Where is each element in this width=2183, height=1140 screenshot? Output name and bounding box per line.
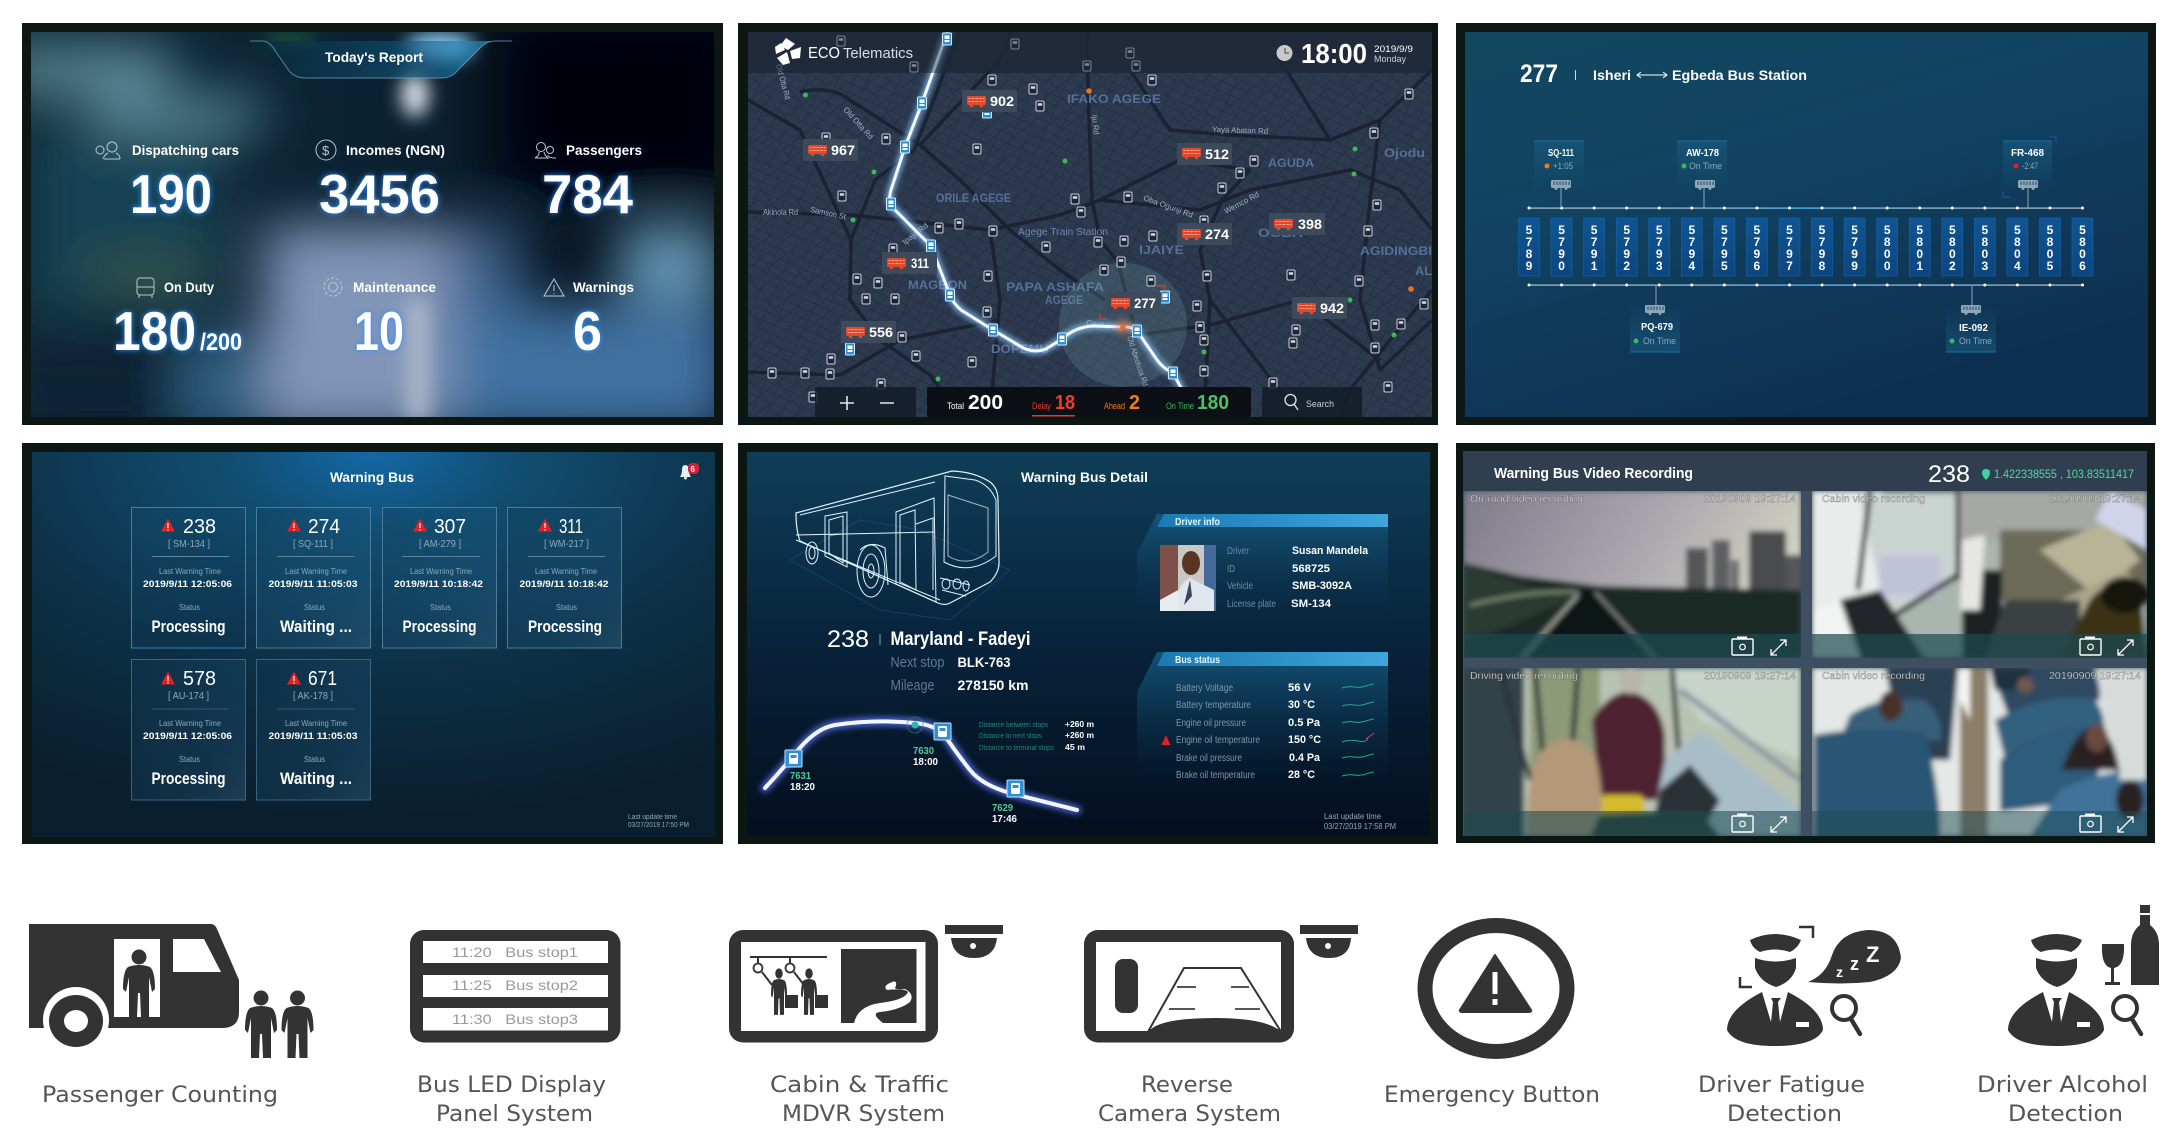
- map place names: Yaya Abatan Rd: [1212, 125, 1268, 136]
- driver info card: SMB-3092A: [1292, 580, 1352, 592]
- bus tag PQ-679: [1630, 285, 1680, 352]
- clock and date: [1276, 44, 1412, 64]
- metric: On Duty: /200: [200, 329, 242, 356]
- bus tag 556: 556: [869, 324, 893, 340]
- icon: LED display: [410, 930, 620, 1042]
- title tab: Today's Report: Today's Report: [325, 49, 423, 65]
- map place names: Old Otta Rd: [774, 63, 792, 100]
- station number columns: 5789: [1526, 223, 1533, 273]
- bus tag 556: [841, 321, 896, 343]
- metric: Warnings: 6: [573, 300, 602, 362]
- feature: Driver Fatigue Detection: [1698, 927, 1901, 1127]
- feature: Bus LED Display Panel System: Bus LED Display: [417, 1073, 606, 1098]
- panel: live route map: [738, 23, 1438, 425]
- feature: Cabin & Traffic MDVR System: MDVR System: [782, 1102, 945, 1127]
- bus status card: Battery temperature: [1176, 700, 1251, 711]
- driver info card: ID: [1227, 564, 1235, 575]
- warning card 671: [ AK-178 ]: [293, 691, 333, 702]
- warning card 274: [256, 508, 370, 648]
- map place names: Iju Rd: [1090, 114, 1101, 135]
- warning card 578: Processing: [152, 769, 226, 788]
- fleet status bar: [927, 387, 1251, 417]
- map place names: Oba Ogunji Rd: [1142, 193, 1194, 220]
- feature: Driver Fatigue Detection: Detection: [1727, 1102, 1842, 1127]
- warning card 311: 311: [559, 516, 583, 538]
- clock and date: Monday: [1374, 54, 1406, 64]
- last update note: Last update time: [628, 812, 677, 821]
- feature: Driver Fatigue Detection: Driver Fatigue: [1698, 1073, 1865, 1098]
- bus tag FR-468: [2003, 137, 2056, 208]
- heading: Warning Bus Video Recording: [1494, 465, 1693, 482]
- bus status card: 30 °C: [1288, 699, 1315, 711]
- video: cabin front: Cabin video recording: [1822, 494, 1925, 505]
- route curve with stops: 7631: [790, 771, 811, 782]
- route heading: [1520, 60, 1807, 88]
- icon: dollar: $: [322, 143, 330, 158]
- warning card 307: [382, 508, 496, 648]
- bus status card: 150 °C: [1288, 734, 1321, 746]
- station number columns: 5805: [2047, 223, 2054, 273]
- warning card 311: [508, 508, 622, 648]
- map place names: Samson St: [810, 205, 847, 222]
- metric: Incomes: [316, 140, 445, 225]
- map place names: AGIDINGBI: [1360, 244, 1432, 258]
- station number columns: 5803: [1981, 223, 1988, 273]
- warning card 307: Status: [430, 603, 451, 612]
- metric: Passengers: 784: [542, 163, 633, 225]
- sparklines: [1342, 684, 1374, 776]
- icon: passengers: [535, 142, 556, 158]
- video: cabin front: 20190909 19:27:14: [2049, 494, 2141, 505]
- route title 238: Maryland - Fadeyi: [890, 629, 1030, 650]
- bus tag 512: 512: [1205, 146, 1229, 162]
- warning card 311: 2019/9/11 10:18:42: [520, 579, 608, 590]
- bus tag SQ-111: +1:05: [1553, 161, 1573, 171]
- bus tag 902: 902: [990, 93, 1014, 109]
- map place names: Capitol Rd: [1086, 318, 1123, 333]
- map place names: Agege Train Station: [1018, 227, 1108, 238]
- warning card 311: Last Warning Time: [535, 567, 598, 576]
- heading: Warning Bus Detail: Warning Bus Detail: [1021, 469, 1148, 485]
- bus tag IE-092: [1946, 285, 1996, 352]
- map place names: AGUDA: [1268, 156, 1314, 170]
- icon: dispatcher: [96, 142, 120, 159]
- warning card 311: Processing: [528, 617, 602, 636]
- warning card 307: Processing: [402, 617, 476, 636]
- map place names: Ojodu: [1384, 146, 1425, 160]
- warning card 671: [256, 660, 370, 800]
- icon: drowsy driver: [1727, 927, 1901, 1046]
- station number columns: 5806: [2079, 223, 2086, 273]
- panel: Today's Report: [22, 23, 723, 425]
- feature: Passenger Counting: [29, 924, 314, 1108]
- driver info card: Vehicle: [1227, 581, 1253, 592]
- bus id and coordinates: 1.422338555 , 103.83511417: [1994, 467, 2134, 481]
- icon: stop 7631: [785, 750, 802, 767]
- distance table: Distance between stops: [979, 722, 1048, 729]
- warning card 671: Waiting ...: [280, 769, 352, 788]
- fleet status bar: Total: [947, 401, 964, 411]
- last update note: 03/27/2019 17:58 PM: [1324, 822, 1396, 831]
- last update note: [1324, 812, 1396, 831]
- bus status card: [1137, 652, 1388, 785]
- metric: On Duty: On Duty: [164, 279, 214, 295]
- map place names: [763, 63, 1432, 387]
- bus status card: Bus status: [1175, 655, 1220, 666]
- warning card 274: Waiting ...: [280, 617, 352, 636]
- station number columns: 5797: [1786, 223, 1793, 273]
- distance table: +260 m: [1065, 720, 1094, 729]
- bus tag 274: [1177, 223, 1232, 245]
- icon: bus with passengers: [29, 924, 314, 1058]
- metric: Maintenance: Maintenance: [353, 279, 436, 295]
- station number columns: 5794: [1688, 223, 1695, 273]
- warning card 578: [ AU-174 ]: [168, 691, 209, 702]
- bus status card: Engine oil pressure: [1176, 718, 1246, 729]
- icon: warning: [1162, 735, 1170, 745]
- logo: ECO Telematics: [775, 38, 913, 65]
- icon: notification bell: [680, 463, 699, 480]
- bus tag 942: [1292, 297, 1347, 319]
- route curve with stops: 7630: [913, 746, 934, 757]
- bus tag 512: [1177, 143, 1232, 165]
- video: cabin front: [1812, 491, 2149, 658]
- bus tag AW-178: On Time: [1689, 161, 1722, 171]
- metric: Warnings: [544, 279, 634, 362]
- route title 238: [827, 626, 1030, 694]
- bus tag IE-092: IE-092: [1959, 323, 1988, 334]
- bus tag AW-178: [1677, 141, 1727, 208]
- warning card 238: Processing: [152, 617, 226, 636]
- bus status card: 0.5 Pa: [1288, 717, 1321, 729]
- icon: stop 7630: [934, 723, 951, 740]
- driver info card: Susan Mandela: [1292, 545, 1369, 557]
- icon: drowsy driver: z: [1836, 964, 1843, 980]
- metric: Maintenance: 10: [354, 300, 404, 362]
- icon: drowsy driver: Z: [1866, 942, 1879, 967]
- fleet status bar: 200: [968, 392, 1003, 414]
- warning card 671: Last Warning Time: [285, 719, 348, 728]
- warning card 578: Status: [179, 755, 200, 764]
- bus tag AW-178: AW-178: [1686, 148, 1719, 159]
- bus status card: 0.4 Pa: [1289, 752, 1321, 764]
- panel: Warning Bus Video Recording: [1456, 443, 2155, 843]
- video: on-road: [1464, 491, 1801, 658]
- warning card 578: 578: [183, 668, 216, 690]
- warning card 238: Last Warning Time: [159, 567, 222, 576]
- map place names: Wemco Rd: [1223, 190, 1260, 216]
- warning card 274: 2019/9/11 11:05:03: [268, 579, 358, 590]
- alert radius circle: [1059, 263, 1187, 387]
- warning card 671: 671: [308, 668, 337, 690]
- icon: LED display: 11:25 Bus stop2: [452, 977, 578, 993]
- icon: dome camera: [945, 925, 1003, 958]
- station number columns: 5804: [2014, 223, 2021, 273]
- feature: Cabin & Traffic MDVR System: Cabin & Traffic: [770, 1073, 949, 1098]
- fleet status bar: 2: [1129, 392, 1140, 414]
- warning card 274: Last Warning Time: [285, 567, 348, 576]
- logo: ECO Telematics: ECO: [808, 45, 840, 62]
- feature: Driver Alcohol Detection: Detection: [2008, 1102, 2123, 1127]
- feature: Emergency Button: Emergency Button: [1384, 1083, 1600, 1108]
- zoom controls: [815, 387, 916, 417]
- last update note: 03/27/2019 17:50 PM: [628, 820, 689, 829]
- bus tag PQ-679: On Time: [1643, 336, 1676, 346]
- feature: Reverse Camera System: Reverse: [1141, 1073, 1233, 1098]
- video: driving: Driving video recording: [1470, 671, 1578, 682]
- video: driving: [1464, 666, 1801, 836]
- distance table: +260 m: [1065, 731, 1094, 740]
- distance table: Distance to terminal stops: [979, 745, 1054, 752]
- icon: gear: [324, 278, 342, 296]
- map place names: Old Abeokuta Rd: [1125, 335, 1150, 387]
- search box: [1262, 387, 1362, 417]
- metric: On Duty: 180: [113, 300, 196, 362]
- fleet status bar: On Time: [1166, 401, 1194, 411]
- route curve with stops: 17:46: [992, 814, 1017, 825]
- feature: Reverse Camera System: [1084, 925, 1358, 1127]
- feature: Cabin & Traffic MDVR System: [729, 925, 1003, 1127]
- warning card 238: [132, 508, 246, 648]
- bus id and coordinates: 238: [1928, 461, 1970, 488]
- driver info card: SM-134: [1291, 598, 1332, 610]
- feature: Driver Alcohol Detection: Driver Alcohol: [1977, 1073, 2148, 1098]
- warning card 307: [ AM-279 ]: [419, 539, 461, 550]
- fleet status bar: Delay: [1032, 401, 1051, 411]
- map place names: OGBA: [1258, 226, 1303, 240]
- distance table: Distance to next stops: [979, 733, 1042, 740]
- bus tag PQ-679: PQ-679: [1641, 322, 1673, 333]
- metric: Warnings: Warnings: [573, 279, 634, 295]
- panel: Warning Bus: [22, 443, 723, 844]
- warning card 578: [132, 660, 246, 800]
- video: driving: 20190909 19:27:14: [1704, 671, 1796, 682]
- feature: Reverse Camera System: Camera System: [1098, 1102, 1281, 1127]
- video: on-road: 20190909 19:27:14: [1704, 494, 1796, 505]
- warning card 238: 2019/9/11 12:05:06: [143, 579, 232, 590]
- icon: notification bell: 6: [690, 465, 696, 474]
- route curve with stops: 18:20: [790, 782, 815, 793]
- warning card 238: [ SM-134 ]: [168, 539, 210, 550]
- map place names: IJAIYE: [1139, 243, 1184, 257]
- feature: Driver Alcohol Detection: [1977, 905, 2159, 1127]
- icon: drowsy driver: z: [1850, 954, 1859, 974]
- bus tag 967: [803, 139, 858, 161]
- icon: driver with alcohol: [2008, 905, 2159, 1046]
- video: passengers: [1812, 668, 2147, 836]
- icon: LED display: 11:20 Bus stop1: [452, 944, 578, 960]
- video: on-road: On-road video recording: [1470, 494, 1583, 505]
- bus status card: 28 °C: [1288, 769, 1315, 781]
- station number columns: 5793: [1656, 223, 1663, 273]
- route title 238: Mileage: [890, 677, 934, 694]
- panel: Warning Bus Detail: [738, 443, 1438, 844]
- bus tag 311: [882, 252, 937, 274]
- feature: Passenger Counting: Passenger Counting: [42, 1083, 278, 1108]
- route title 238: 238: [827, 626, 869, 653]
- feature: Emergency Button: [1384, 926, 1600, 1108]
- driver info card: 568725: [1292, 563, 1330, 575]
- route stops: [846, 33, 1178, 379]
- station number columns: 5799: [1851, 223, 1858, 273]
- station number columns: 5798: [1819, 223, 1826, 273]
- station number columns: 5792: [1623, 223, 1630, 273]
- bus stop markers: [768, 36, 1428, 402]
- bus tag IE-092: On Time: [1959, 336, 1992, 346]
- metric: Passengers: Passengers: [566, 142, 642, 158]
- warning card 238: 238: [183, 516, 216, 538]
- feature: Bus LED Display Panel System: [410, 930, 620, 1127]
- station number columns: 5791: [1591, 223, 1598, 273]
- icon: bus front: [137, 278, 154, 298]
- warning card 578: 2019/9/11 12:05:06: [143, 731, 232, 742]
- bus tag 398: [1269, 213, 1325, 235]
- search box: Search: [1306, 399, 1334, 409]
- glowing route line: [890, 33, 1197, 417]
- status dots: [803, 88, 1414, 381]
- alert marker and brackets: [1100, 286, 1165, 336]
- metric: Dispatching cars: [96, 142, 239, 225]
- warning card 311: Status: [556, 603, 577, 612]
- map place names: PAPA ASHAFA: [1006, 280, 1104, 294]
- bus tag 277: [1106, 292, 1161, 314]
- last update note: [628, 812, 689, 829]
- icon: MDVR screen: [729, 930, 938, 1042]
- bus status card: Engine oil temperature: [1176, 735, 1260, 746]
- map place names: ORILE AGEGE: [936, 191, 1011, 205]
- fleet status bar: 18: [1055, 392, 1075, 414]
- map place names: MAGBON: [908, 278, 967, 292]
- bus tag SQ-111: [1534, 141, 1584, 208]
- warning card 274: 274: [308, 516, 340, 538]
- metric: Dispatching cars: Dispatching cars: [132, 142, 239, 158]
- driver info card: Driver: [1227, 546, 1250, 557]
- icon: dome camera: [1300, 925, 1358, 958]
- warning card 671: 2019/9/11 11:05:03: [268, 731, 358, 742]
- bus tag 967: 967: [831, 142, 855, 158]
- map place names: IFAKO AGEGE: [1067, 92, 1161, 106]
- video: passengers: Cabin video recording: [1822, 671, 1925, 682]
- metric: Incomes: 3456: [319, 163, 440, 225]
- bus status card: Battery Voltage: [1176, 683, 1233, 694]
- metric: Dispatching cars: 190: [130, 163, 212, 225]
- clock and date: 2019/9/9: [1374, 44, 1413, 54]
- last update note: Last update time: [1324, 812, 1382, 821]
- route title 238: 278150 km: [958, 677, 1028, 693]
- icon: warning triangle: [544, 279, 564, 296]
- warning card 307: 307: [434, 516, 466, 538]
- map place names: AL: [1415, 264, 1432, 278]
- bus status card: 56 V: [1288, 682, 1312, 694]
- station number columns: 5800: [1884, 223, 1891, 273]
- bus tag SQ-111: SQ-111: [1548, 148, 1574, 159]
- driver info card: Driver info: [1175, 517, 1220, 528]
- station number columns: 5790: [1558, 223, 1565, 273]
- bus tag 274: 274: [1205, 226, 1229, 242]
- bus tag 277: 277: [1134, 295, 1156, 311]
- station number columns: [1518, 218, 2093, 276]
- map place names: AGEGE: [1045, 293, 1083, 307]
- fleet status bar: 180: [1197, 392, 1229, 414]
- bus tag FR-468: FR-468: [2011, 148, 2044, 159]
- route curve with stops: 18:00: [913, 757, 938, 768]
- station number columns: 5802: [1949, 223, 1956, 273]
- icon: emergency button: [1425, 926, 1567, 1052]
- metric: Passengers: [535, 142, 642, 225]
- warning card 274: [ SQ-111 ]: [293, 539, 333, 550]
- warning card 274: Status: [304, 603, 325, 612]
- icon: reverse camera screen: [1084, 930, 1294, 1042]
- video: passengers: 20190909 19:27:14: [2049, 671, 2141, 682]
- driver info card: [1137, 514, 1388, 611]
- map place names: DOPEMU: [991, 342, 1049, 356]
- bus tag 311: 311: [911, 255, 929, 271]
- map place names: Ipaja Rd: [901, 221, 930, 247]
- route title 238: Next stop: [890, 654, 944, 671]
- warning card 307: 2019/9/11 10:18:42: [394, 579, 483, 590]
- map place names: Old Otta Rd: [842, 105, 875, 141]
- warning card 238: Status: [179, 603, 200, 612]
- metric: On Duty: [113, 278, 242, 362]
- clock and date: 18:00: [1301, 38, 1367, 69]
- bus tag 942: 942: [1320, 300, 1344, 316]
- driver info card: License plate: [1227, 599, 1276, 610]
- warning card 671: Status: [304, 755, 325, 764]
- distance table: 45 m: [1065, 743, 1085, 752]
- bus tag 398: 398: [1298, 216, 1322, 232]
- route curve with stops: 7629: [992, 803, 1013, 814]
- warning card 307: Last Warning Time: [410, 567, 473, 576]
- bus status card: Brake oil pressure: [1176, 753, 1242, 764]
- fleet status bar: Ahead: [1104, 401, 1125, 411]
- icon: LED display: 11:30 Bus stop3: [452, 1011, 578, 1027]
- metric: Incomes: Incomes (NGN): [346, 142, 445, 158]
- warning card 311: [ WM-217 ]: [544, 539, 589, 550]
- route heading: Isheri: [1593, 67, 1631, 83]
- bus wireframe illustration: [790, 471, 1010, 620]
- map place names: Akinola Rd: [763, 208, 798, 217]
- route title 238: BLK-763: [958, 654, 1011, 670]
- distance table: [979, 720, 1094, 752]
- route heading: Egbeda Bus Station: [1672, 67, 1807, 83]
- bus tag FR-468: -2:47: [2022, 161, 2038, 171]
- route heading: 277: [1520, 60, 1558, 88]
- station number columns: 5795: [1721, 223, 1728, 273]
- route curve with stops: [765, 717, 1077, 825]
- metric: Maintenance: [324, 278, 436, 362]
- station rails: [1529, 208, 2083, 286]
- bus tag 902: [962, 90, 1017, 112]
- driver photo: [1160, 545, 1216, 611]
- bus status card: Brake oil temperature: [1176, 770, 1255, 781]
- station number columns: 5796: [1754, 223, 1761, 273]
- station number columns: 5801: [1916, 223, 1923, 273]
- feature: Bus LED Display Panel System: Panel System: [436, 1102, 593, 1127]
- warning card 578: Last Warning Time: [159, 719, 222, 728]
- bus id and coordinates: [1928, 461, 2134, 488]
- logo: ECO Telematics: Telematics: [843, 45, 913, 62]
- title tab: Today's Report: [250, 41, 512, 78]
- icon: stop 7629: [1007, 780, 1024, 797]
- panel: route line diagram 277: [1456, 23, 2156, 425]
- heading: Warning Bus: Warning Bus: [330, 469, 414, 485]
